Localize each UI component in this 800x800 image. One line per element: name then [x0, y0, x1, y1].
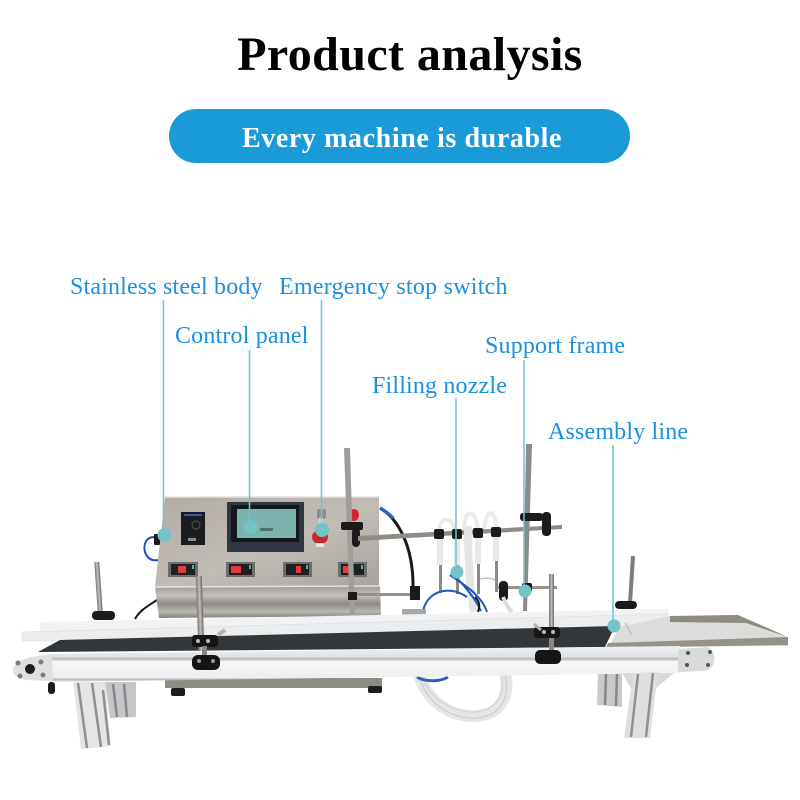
vertical rod on cabinet — [341, 448, 363, 616]
left lever — [48, 682, 55, 694]
outfeed tray — [606, 615, 788, 648]
callout: Support frame — [485, 333, 625, 598]
callout: Emergency stop switch — [279, 274, 508, 537]
front conveyor legs — [73, 672, 674, 749]
support rod — [498, 444, 557, 611]
subtitle pill: Every machine is durable — [242, 123, 562, 154]
blue air tubes — [423, 575, 487, 612]
subtitle pill — [169, 109, 630, 163]
rear white side rail — [40, 609, 669, 632]
callout: Assembly line: Assembly line — [548, 419, 688, 445]
right end plate — [678, 647, 714, 672]
callout: Control panel — [175, 323, 309, 534]
callout: Stainless steel body: Stainless steel body — [70, 274, 263, 300]
callout: Assembly line — [548, 419, 688, 632]
valve block — [402, 609, 426, 616]
rear conveyor legs — [105, 673, 622, 718]
touch screen — [227, 502, 304, 552]
filling nozzles — [434, 513, 512, 612]
mode switch panel — [181, 512, 205, 545]
right guide rod with clamp — [615, 556, 637, 609]
base plate and feet — [165, 678, 382, 696]
cabinet body — [154, 497, 381, 618]
front guide clamp left — [192, 576, 225, 670]
left end plate — [13, 654, 53, 681]
callout: Emergency stop switch: Emergency stop switch — [279, 274, 508, 300]
temperature displays — [168, 562, 367, 577]
conveyor belt — [38, 626, 615, 652]
white hose loop — [417, 672, 506, 718]
black hose on right — [380, 508, 413, 590]
callout: Support frame: Support frame — [485, 333, 625, 359]
callout: Stainless steel body — [70, 274, 263, 542]
title: Product analysis — [237, 28, 583, 81]
callout: Control panel: Control panel — [175, 323, 309, 349]
machine illustration — [13, 444, 788, 749]
rear guide rod with clamp — [92, 562, 115, 620]
blue air hose on left — [144, 537, 158, 560]
conveyor front rail — [50, 646, 680, 682]
nozzle crossbar — [357, 525, 562, 600]
emergency stop button — [312, 509, 359, 547]
callout: Filling nozzle — [372, 373, 507, 578]
front guide clamp right — [534, 574, 561, 664]
power cable — [135, 600, 157, 619]
left hose fitting — [154, 534, 160, 545]
front white side rail — [22, 614, 668, 641]
callout: Filling nozzle: Filling nozzle — [372, 373, 507, 399]
